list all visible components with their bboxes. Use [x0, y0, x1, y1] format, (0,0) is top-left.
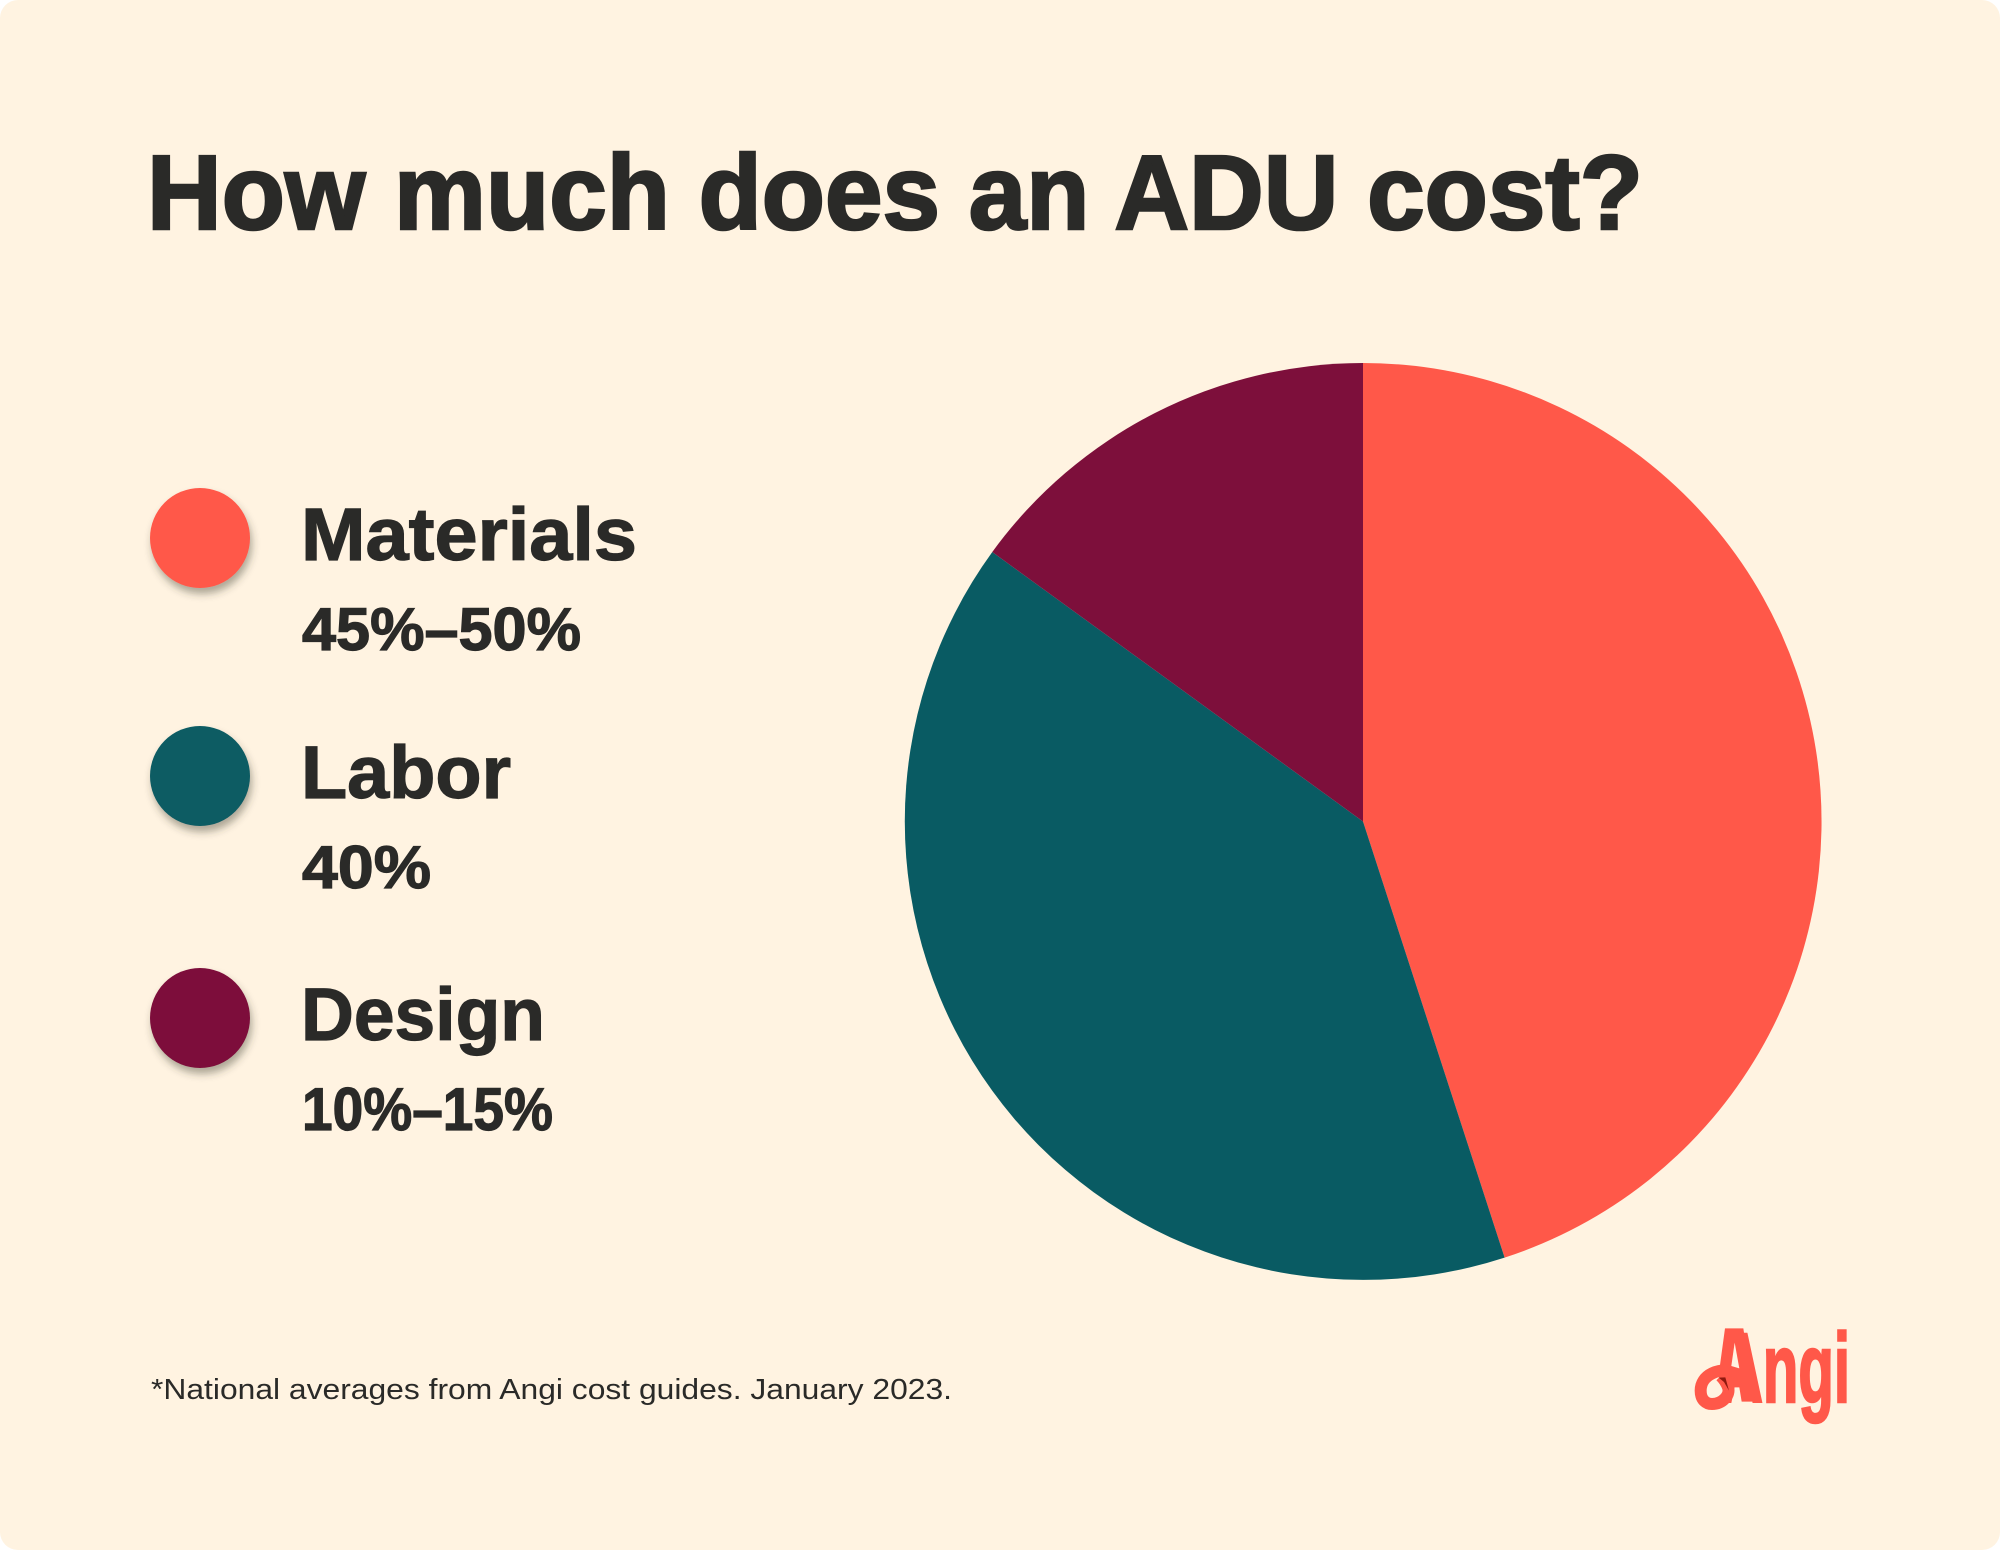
slice: labor [905, 552, 1505, 1280]
swatch: labor [150, 726, 250, 826]
label: design: Design [301, 973, 545, 1056]
label: materials: Materials [301, 493, 637, 576]
swatch: materials [150, 488, 250, 588]
title: How much does an ADU cost? [147, 134, 1643, 252]
slice: design [992, 363, 1363, 822]
legend [150, 488, 637, 1143]
value: materials: 45%–50% [302, 596, 581, 663]
logo swash [1701, 1328, 1755, 1404]
pie chart [905, 363, 1822, 1280]
swatch: design [150, 968, 250, 1068]
slice: materials [1363, 363, 1822, 1258]
label: labor: Labor [301, 731, 511, 814]
legend item: labor [150, 726, 511, 901]
legend item: design [150, 968, 553, 1143]
legend item: materials [150, 488, 637, 663]
value: labor: 40% [302, 834, 431, 901]
footnote: *National averages from Angi cost guides. January 2023. [151, 1374, 952, 1406]
logo: Angi [1701, 1313, 1850, 1423]
value: design: 10%–15% [302, 1076, 553, 1143]
logo: Angi: Angi [1721, 1313, 1850, 1423]
